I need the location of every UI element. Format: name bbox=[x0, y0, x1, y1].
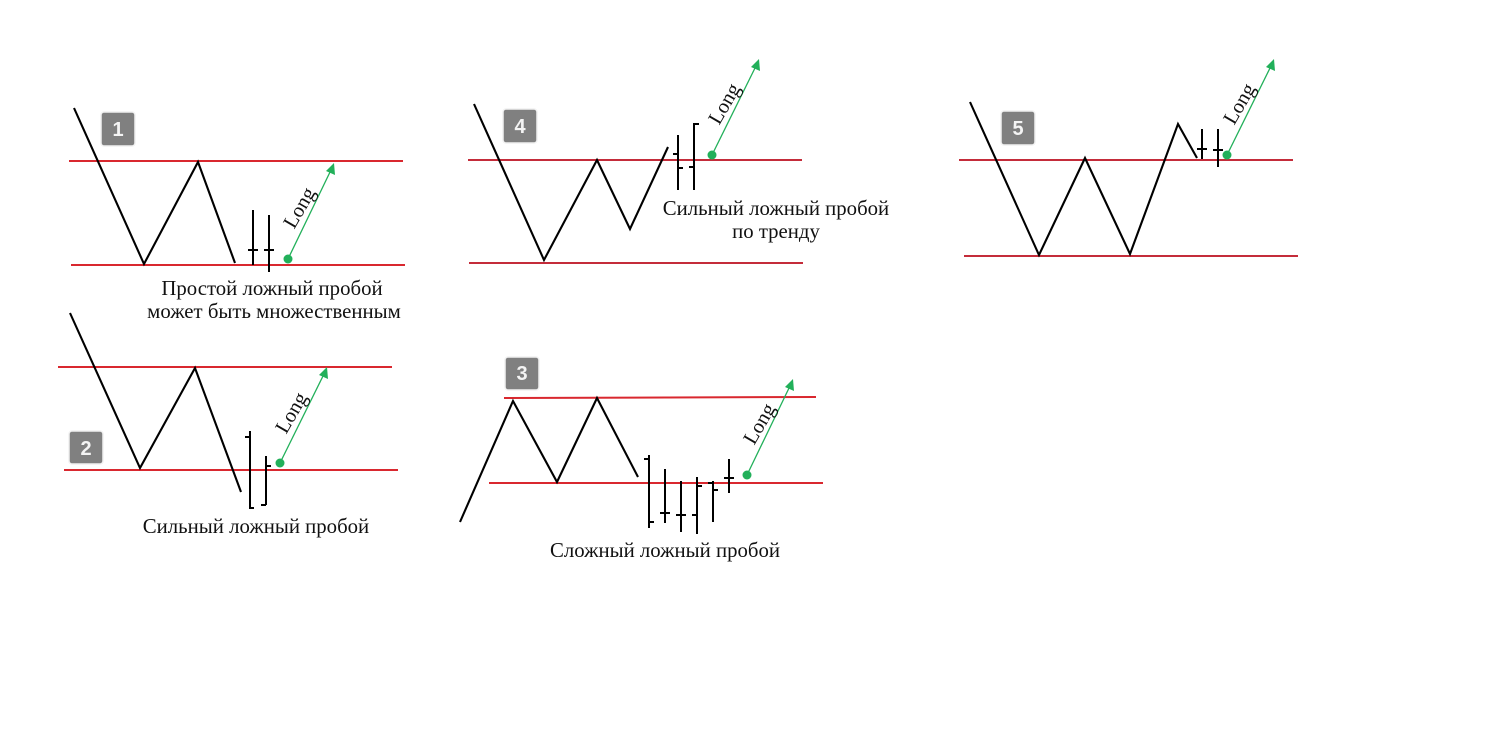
price zigzag 4 bbox=[474, 104, 668, 260]
panel 4: strong false breakout with trend bbox=[468, 59, 889, 263]
bars 2 bbox=[245, 431, 271, 509]
panel 2: strong false breakout bbox=[58, 313, 398, 538]
badge 5: 5 bbox=[1012, 118, 1024, 140]
badge 4: 4 bbox=[514, 116, 526, 138]
caption 4: Сильный ложный пробой bbox=[663, 197, 889, 220]
badge 5 bbox=[1001, 111, 1035, 145]
panel 3: complex false breakout bbox=[460, 357, 823, 562]
long arrow 4 bbox=[708, 59, 760, 160]
bars 4 bbox=[673, 123, 699, 190]
price zigzag 5 bbox=[970, 102, 1197, 255]
label: Long 5: Long bbox=[1219, 80, 1260, 128]
long arrow 2 bbox=[276, 367, 328, 468]
panel 5: breakout above level bbox=[959, 59, 1298, 256]
caption 1: может быть множественным bbox=[147, 300, 401, 323]
label: Long 3: Long bbox=[739, 400, 780, 448]
badge 2: 2 bbox=[80, 438, 92, 460]
price zigzag 3 bbox=[460, 398, 638, 522]
price zigzag 1 bbox=[74, 108, 235, 264]
caption 4: по тренду bbox=[732, 220, 821, 243]
panel 1: simple false breakout bbox=[69, 108, 405, 323]
caption 3: Сложный ложный пробой bbox=[550, 539, 780, 562]
badge 3: 3 bbox=[516, 363, 528, 385]
caption 2: Сильный ложный пробой bbox=[143, 515, 369, 538]
badge 1: 1 bbox=[112, 119, 124, 141]
caption 1: Простой ложный пробой bbox=[161, 277, 383, 300]
badge 2 bbox=[69, 431, 103, 464]
price zigzag 2 bbox=[70, 313, 241, 492]
badge 3 bbox=[505, 357, 539, 390]
bars 3 bbox=[644, 455, 734, 534]
bars 5 bbox=[1197, 129, 1223, 167]
label: Long 2: Long bbox=[271, 389, 312, 437]
label: Long 1: Long bbox=[279, 184, 320, 232]
label: Long 4: Long bbox=[704, 80, 745, 128]
badge 1 bbox=[101, 112, 135, 146]
long arrow 5 bbox=[1222, 59, 1275, 160]
bars 1 bbox=[248, 210, 274, 272]
long arrow 3 bbox=[742, 379, 794, 480]
long arrow 1 bbox=[284, 163, 335, 264]
badge 4 bbox=[503, 109, 537, 143]
